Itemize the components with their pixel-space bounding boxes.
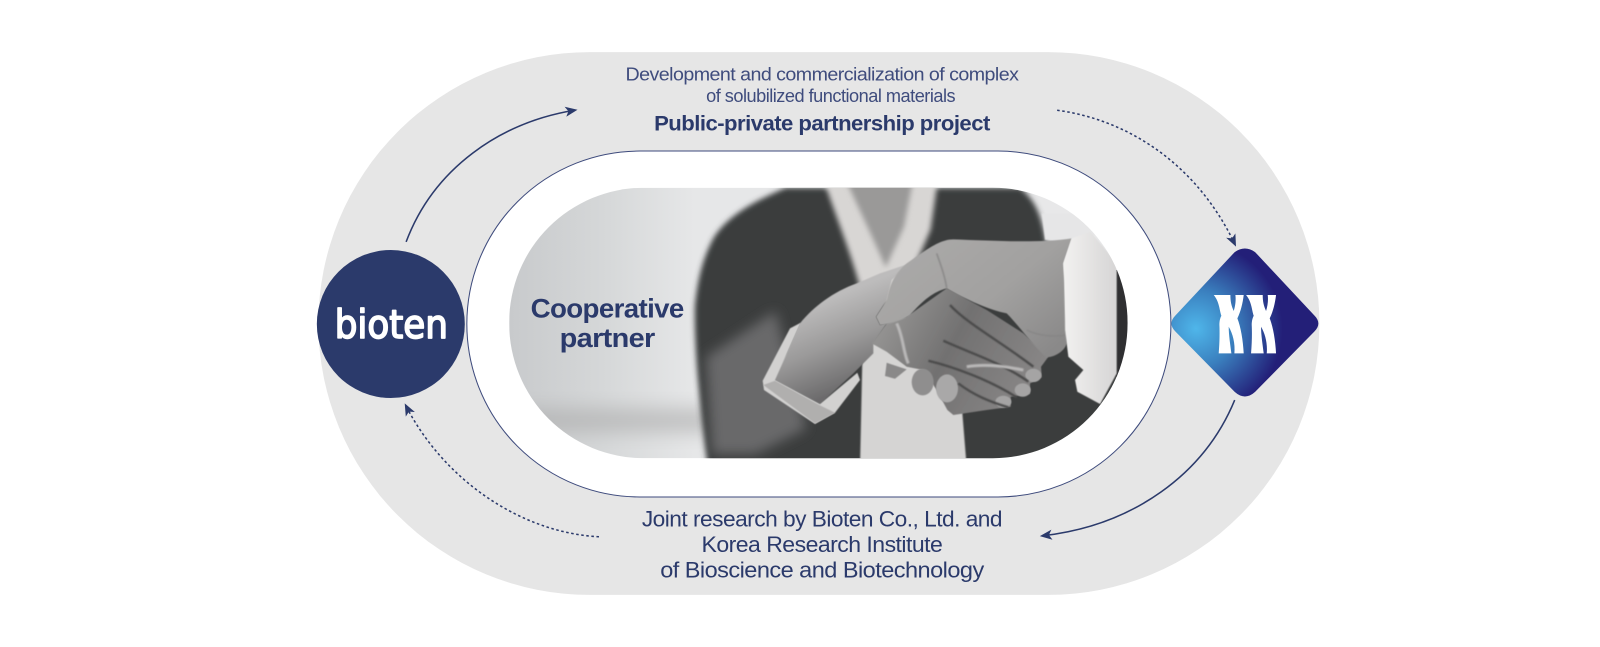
- infographic diagram: [316, 52, 1320, 595]
- arrow: project to KK: [1057, 110, 1235, 244]
- panel: outer grey pill: [318, 52, 1319, 595]
- fingertips: [1025, 369, 1041, 382]
- arrow: bioten to project: [406, 110, 574, 242]
- logo: KK diamond: [1171, 248, 1318, 396]
- text block: bottom joint research: Korea Research Institute: [702, 532, 942, 557]
- text block: bottom joint research: [642, 507, 1002, 583]
- arrow: KK to joint research: [1043, 400, 1235, 536]
- cuff: [763, 323, 860, 424]
- text block: top project description: Public-private partnership project: [654, 112, 990, 136]
- heading: Cooperative partner: Cooperative: [531, 293, 684, 323]
- icon: KK mark: [1214, 295, 1276, 353]
- top right bg: [1042, 214, 1050, 240]
- text block: top project description: [626, 64, 1019, 136]
- small finger: [885, 363, 907, 379]
- text block: bottom joint research: of Bioscience and Biotechnology: [660, 558, 985, 583]
- finger creases: [928, 305, 1033, 407]
- text block: bottom joint research: Joint research by Bioten Co., Ltd. and: [642, 507, 1002, 532]
- text block: top project description: of solubilized functional materials: [706, 85, 955, 106]
- heading: Cooperative partner: partner: [560, 323, 655, 353]
- right hand: [876, 238, 1072, 357]
- heading: Cooperative partner: [531, 293, 684, 353]
- clasped thumbs: [912, 369, 934, 395]
- left forearm: [773, 263, 910, 404]
- logo: bioten: [317, 250, 465, 398]
- right sleeve: [1063, 232, 1117, 404]
- right dark sliver: [1116, 270, 1128, 377]
- arrow: joint research to bioten: [406, 406, 599, 537]
- logo: bioten: bioten: [335, 303, 448, 348]
- panel: inner white pill: [467, 151, 1171, 497]
- photo: handshake: [509, 188, 1128, 458]
- text block: top project description: Development and commercialization of complex: [626, 64, 1019, 85]
- shirt lower: [860, 343, 967, 467]
- left hand palm and fingers: [872, 288, 1048, 415]
